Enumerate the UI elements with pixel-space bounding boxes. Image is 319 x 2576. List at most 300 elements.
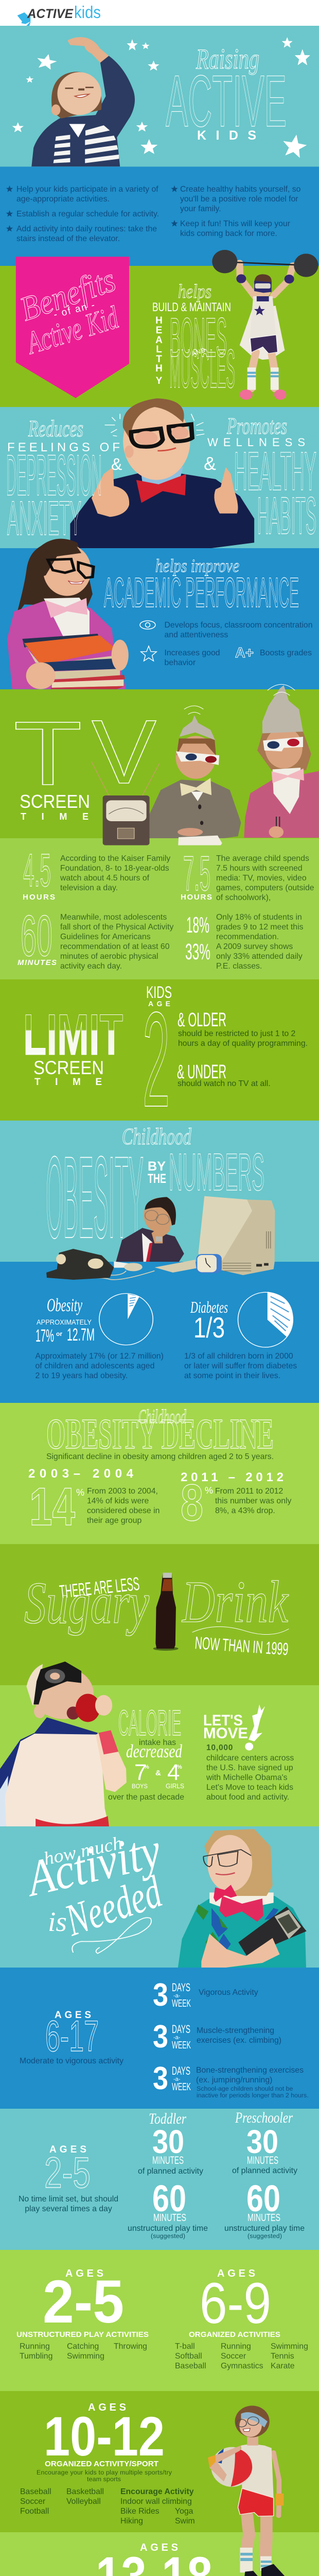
text: calorie intake decreased: GIRLS: [166, 1782, 184, 1790]
column: toddler: 30: [152, 2123, 184, 2160]
heading: helps build and maintain healthy bones and muscles: AND: [191, 346, 207, 358]
heading: reduces feelings of depression and anxiety: [6, 415, 122, 545]
stat: 7.5 hours: games, computers (outside: [216, 884, 314, 892]
panel: benefits, bones and muscles: [0, 250, 319, 407]
panel: ages 10-12: [0, 2391, 319, 2532]
text: 10,000 childcare centers: with Michelle Obama's: [206, 1773, 288, 1782]
text: calorie intake decreased: %: [177, 1764, 182, 1770]
heading: Raising Active Kids: [166, 43, 287, 143]
column: ages 2-5 activities: 2-5: [43, 2268, 124, 2336]
text: calorie intake decreased: 4: [167, 1760, 180, 1785]
stat: 60 minutes: activity each day.: [60, 962, 122, 971]
stat: 2003 to 2004: %: [76, 1487, 84, 1498]
heading: childhood obesity decline: Significant decline in obesity among children aged 2 to 5 years.: [46, 1452, 274, 1461]
column: preschooler: of planned activity: [232, 2166, 297, 2175]
text: tips right column: Create healthy habits yourself, so: [180, 185, 301, 194]
column: ages 6-9 activities: AGES: [217, 2268, 255, 2279]
column: ages 6-9 activities: [175, 2268, 308, 2370]
icon: smiling star: [141, 646, 156, 661]
text: tips left column: Establish a regular schedule for activity.: [16, 210, 159, 218]
panel: calorie intake and Let's Move: [0, 1662, 319, 1826]
text: obesity description: Approximately 17% (or 12.7 million): [35, 1352, 164, 1361]
column: ages 2-5 activities: Tumbling: [20, 2352, 52, 2361]
item: 3 days a week muscle-strengthening: -a-: [173, 2035, 181, 2041]
logo: Let's Move: MOVE: [203, 1725, 248, 1742]
text: tips right column: Keep it fun! This will keep your: [180, 219, 290, 228]
list: encourage activity: Encourage Activity: [120, 2487, 194, 2496]
item: 3 days a week bone-strengthening: -a-: [173, 2076, 181, 2082]
text: diabetes description: at some point in their lives.: [184, 1371, 280, 1380]
heading: helps build and maintain healthy bones and muscles: A: [155, 335, 163, 346]
text: obesity description: 2 to 19 years had obesity.: [35, 1371, 128, 1380]
item: 3 days a week muscle-strengthening: 3: [153, 2019, 168, 2055]
photo: girl with glasses holding a calculator: [178, 1829, 307, 1968]
heading: ages 10-12: team sports: [87, 2476, 121, 2483]
stat: 2003 to 2004: [28, 1467, 160, 1537]
icons: star bullets: [6, 185, 178, 232]
stat: 2011 to 2012: %: [205, 1485, 213, 1496]
photo: girl with glasses holding books: [7, 539, 129, 689]
stat: obesity: [36, 1295, 95, 1346]
heading: ages 2-5: No time limit set, but should: [19, 2195, 118, 2204]
text: tips left column: age-appropriate activities.: [16, 195, 110, 204]
heading: helps build and maintain healthy bones and muscles: L: [156, 344, 162, 355]
list: encourage activity: Hiking: [120, 2517, 143, 2526]
column: preschooler: 60: [246, 2178, 280, 2219]
stat: 18 and 33 percent: 33%: [185, 939, 210, 964]
photo: girl lifting barbell: [212, 250, 318, 400]
stat: 18 and 33 percent: P.E. classes.: [216, 962, 262, 971]
text: calorie intake decreased: intake has: [139, 1738, 176, 1747]
stat: 60 minutes: [17, 904, 173, 971]
text: calorie intake decreased: 7: [134, 1760, 147, 1785]
item: 3 days a week muscle-strengthening: [153, 2019, 281, 2055]
heading: helps build and maintain healthy bones and muscles: T: [156, 354, 162, 365]
text: diabetes description: or later will suffer from diabetes: [184, 1362, 297, 1370]
text: develops focus: [165, 621, 313, 639]
stat: diabetes: 1/3: [193, 1311, 225, 1344]
panel: sugary drinks: [0, 1544, 319, 1685]
panel: screen time statistics: [0, 838, 319, 979]
text: develops focus: and attentiveness: [165, 631, 228, 639]
panel: academic performance: [0, 539, 319, 689]
heading: ages 10-12: AGES: [88, 2402, 126, 2413]
stat: 2011 to 2012: From 2011 to 2012: [215, 1487, 283, 1496]
column: ages 2-5 activities: UNSTRUCTURED PLAY ACTIVITIES: [16, 2330, 149, 2339]
heading: limit screen time: [23, 1003, 123, 1088]
stat: 18 and 33 percent: A 2009 survey shows: [216, 942, 293, 951]
heading: ages 10-12: 10-12: [44, 2405, 165, 2467]
heading: ages 10-12: [37, 2402, 172, 2483]
text: 2 and under: & UNDER: [177, 1061, 226, 1083]
photo: boy reaching up with stars: [12, 37, 310, 166]
stat: 2011 to 2012: 8%, a 43% drop.: [215, 1506, 275, 1515]
logo wordmark: [27, 3, 101, 22]
stat: 2003 to 2004: 2003– 2004: [28, 1467, 134, 1481]
heading: there are less sugary drink now than in 1999: Sugary: [24, 1570, 149, 1636]
logo wordmark: kids: [74, 3, 101, 22]
stat: 7.5 hours: media: TV, movies, video: [216, 874, 307, 883]
heading: limit screen time: TIME: [34, 1077, 102, 1088]
heading: how much activity is needed: Needed: [59, 1867, 168, 1946]
chart: diabetes pie: [238, 1292, 293, 1347]
stat: obesity: 12.7M: [67, 1325, 95, 1345]
text: 10,000 childcare centers: about food and activity.: [206, 1793, 289, 1802]
item: 3 days a week bone-strengthening: School-age children should not be: [197, 2085, 293, 2092]
column: toddler: Toddler: [149, 2110, 186, 2127]
text: 10,000 childcare centers: [206, 1743, 294, 1802]
list: encourage activity: Bike Rides: [120, 2507, 160, 2516]
text: diabetes description: 1/3 of all children born in 2000: [184, 1352, 293, 1361]
item: 3 days a week bone-strengthening: WEEK: [172, 2081, 191, 2093]
column: toddler: unstructured play time: [128, 2224, 208, 2233]
stat: 4.5 hours: 4.5: [23, 845, 51, 896]
list: organized sports: Baseball: [20, 2487, 51, 2496]
panel: limit screen time: 2: [143, 984, 170, 1135]
stat: 2011 to 2012: 2011 – 2012: [181, 1470, 283, 1484]
stat: 60 minutes: 60: [21, 904, 52, 968]
panel: obesity by the numbers heading: [0, 1121, 319, 1262]
text: calorie intake decreased: BOYS: [132, 1783, 148, 1790]
graphic: kids age 2: [143, 983, 172, 1135]
text: increases good behavior: Increases good: [165, 649, 220, 657]
stat: 18 and 33 percent: 18%: [186, 912, 209, 938]
stat: 18 and 33 percent: [185, 912, 304, 971]
item: 3 days a week bone-strengthening: (ex. jumping/running): [196, 2076, 272, 2084]
column: preschooler: (suggested): [247, 2232, 282, 2240]
text: tips right column: kids coming back for more.: [180, 229, 277, 238]
stat: 60 minutes: Meanwhile, most adolescents: [60, 913, 167, 922]
stat: 7.5 hours: [181, 846, 314, 902]
stat: 2011 to 2012: this number was only: [215, 1497, 291, 1505]
stat: 4.5 hours: [23, 845, 170, 902]
text: calorie intake decreased: [108, 1703, 184, 1802]
text: increases good behavior: [165, 649, 220, 667]
heading: there are less sugary drink now than in 1999: THERE ARE LESS: [59, 1573, 140, 1602]
panel: ages 2-5 toddler and preschooler: [0, 2109, 319, 2250]
panel: limit screen time: [0, 979, 319, 1135]
heading: childhood obesity decline: Childhood: [138, 1406, 187, 1428]
heading: ages 6-17: Moderate to vigorous activity: [20, 2057, 123, 2065]
item: 3 days a week muscle-strengthening: Muscle-strengthening: [197, 2026, 274, 2035]
heading: helps build and maintain healthy bones and muscles: [152, 281, 235, 399]
column: ages 6-9 activities: Karate: [271, 2362, 295, 2370]
column: ages 6-9 activities: Running: [221, 2342, 251, 2351]
photo: boy and girl with foil hats and 3D glasses: [150, 684, 319, 839]
heading: helps improve academic performance: helps improve: [155, 555, 239, 576]
text: increases good behavior: behavior: [165, 658, 196, 667]
panel: obesity and diabetes statistics: [0, 1262, 319, 1403]
panel: ages 13-18: [0, 2532, 319, 2576]
heading: ages 13-18: AGES: [140, 2542, 178, 2553]
heading: how much activity is needed: [20, 1822, 168, 1954]
text: 10,000 childcare centers: the U.S. have signed up: [206, 1764, 293, 1772]
heading: promotes wellness and healthy habits: &: [204, 453, 216, 474]
stat: 7.5 hours: of schoolwork),: [216, 893, 271, 902]
photo: soda bottle: [153, 1573, 289, 1651]
item: 3 days a week bone-strengthening: [153, 2061, 309, 2099]
heading: promotes wellness and healthy habits: [204, 413, 316, 545]
column: toddler: (suggested): [151, 2232, 185, 2240]
heading: promotes wellness and healthy habits: Promotes: [226, 413, 287, 439]
stat: 18 and 33 percent: Only 18% of students in: [216, 913, 302, 922]
item: 3 days a week muscle-strengthening: DAYS: [172, 2023, 190, 2036]
stat: 2003 to 2004: 14: [29, 1477, 75, 1537]
logo wordmark: ACTIVE: [27, 7, 74, 21]
column: ages 2-5 activities: Catching: [67, 2342, 99, 2351]
heading: ages 10-12: ORGANIZED ACTIVITY/SPORT: [45, 2460, 158, 2468]
column: ages 2-5 activities: Swimming: [67, 2352, 104, 2361]
column: toddler: MINUTES: [153, 2212, 186, 2224]
column: preschooler: 30: [246, 2123, 278, 2160]
stat: 2003 to 2004: their age group: [87, 1516, 141, 1525]
item: 3 days a week bone-strengthening: Bone-strengthening exercises: [196, 2066, 304, 2075]
heading: how much activity is needed: Activity: [20, 1822, 166, 1908]
stat: obesity: or: [56, 1330, 62, 1337]
item: 3 days a week vigorous activity: WEEK: [172, 1998, 191, 2009]
panel: logo header: [0, 0, 319, 28]
heading: childhood obesity by the numbers: Childhood: [122, 1123, 192, 1149]
item: 3 days a week vigorous activity: DAYS: [172, 1981, 190, 1994]
heading: helps build and maintain healthy bones and muscles: helps: [178, 281, 211, 302]
stat: 4.5 hours: According to the Kaiser Family: [60, 854, 170, 863]
text: 2 and older: should be restricted to just 1 to 2: [178, 1029, 295, 1038]
text: tips left column: stairs instead of the elevator.: [16, 234, 120, 243]
list: encourage activity: [120, 2487, 195, 2526]
column: toddler: [128, 2110, 208, 2240]
stat: obesity: APPROXIMATELY: [37, 1318, 92, 1326]
stat: 2011 to 2012: [181, 1470, 291, 1532]
text: calorie intake decreased: %: [144, 1764, 149, 1770]
stat: 18 and 33 percent: grades 9 to 12 meet this: [216, 923, 304, 931]
text: tips left column: Add activity into daily routines: take the: [16, 225, 157, 233]
heading: limit screen time: LIMIT: [23, 1003, 123, 1067]
text: obesity description: [35, 1352, 164, 1380]
text: calorie intake decreased: &: [155, 1769, 161, 1777]
panel: calorie intake and Let's Move: CALORIE: [118, 1703, 181, 1743]
panel: obesity decline: [0, 1403, 319, 1544]
stat: 7.5 hours: The average child spends: [216, 854, 309, 863]
heading: how much activity is needed: is: [48, 1906, 67, 1937]
item: 3 days a week muscle-strengthening: exercises (ex. climbing): [197, 2036, 281, 2045]
column: ages 6-9 activities: 6-9: [200, 2271, 271, 2335]
heading: helps build and maintain healthy bones and muscles: H: [155, 315, 163, 326]
panel: hero: [0, 26, 319, 167]
item: 3 days a week vigorous activity: 3: [153, 1977, 168, 2013]
heading: ages 2-5: 2-5: [44, 2148, 91, 2197]
heading: limit screen time: SCREEN: [33, 1057, 104, 1078]
list: organized sports: [20, 2487, 104, 2516]
stat: 2003 to 2004: 14% of kids were: [87, 1497, 149, 1505]
heading: TV screen time: SCREEN: [20, 791, 90, 812]
logo: Let's Move: [203, 1704, 265, 1751]
stat: 60 minutes: recommendation of at least 60: [60, 942, 170, 951]
list: encourage activity: Yoga: [175, 2507, 193, 2516]
list: encourage activity: Swim: [175, 2517, 195, 2526]
column: preschooler: Preschooler: [235, 2109, 293, 2126]
stat: obesity: 17%: [36, 1326, 54, 1346]
stat: 60 minutes: fall short of the Physical Activity: [60, 923, 173, 931]
heading: TV screen time: T: [13, 703, 82, 804]
heading: childhood obesity by the numbers: BY: [148, 1159, 166, 1174]
column: preschooler: unstructured play time: [224, 2224, 305, 2233]
text: 10,000 childcare centers: Let's Move to teach kids: [206, 1783, 293, 1792]
heading: reduces feelings of depression and anxiety: ANXIETY: [7, 491, 81, 545]
stat: obesity: Obesity: [47, 1295, 82, 1315]
text: tips right column: [180, 185, 301, 238]
chart: obesity pie: [99, 1294, 153, 1345]
icon: Active Kids mascot: [17, 12, 30, 28]
stat: 18 and 33 percent: recommendation.: [216, 933, 279, 941]
list: encourage activity: Indoor wall climbing: [120, 2497, 192, 2506]
heading: helps build and maintain healthy bones and muscles: Y: [156, 376, 163, 386]
banner: Benefits of an Active Kid: [15, 257, 129, 398]
heading: reduces feelings of depression and anxiety: Reduces: [28, 415, 83, 442]
stat: 60 minutes: MINUTES: [17, 958, 57, 967]
panel: tips for parents: [0, 167, 319, 266]
text: tips right column: your family.: [180, 205, 221, 213]
text: calorie intake decreased: over the past decade: [108, 1793, 184, 1802]
text: 2 and older: [178, 1009, 308, 1048]
column: toddler: MINUTES: [152, 2155, 184, 2166]
icon: A plus grade: A+: [235, 645, 254, 660]
heading: reduces feelings of depression and anxiety: &: [111, 455, 122, 473]
photo: analog meter with antennas and notepad: [92, 761, 222, 845]
panel: TV screen time: [0, 684, 319, 839]
photo: bored boy in a suit: [116, 1197, 184, 1262]
heading: ages 2-5: AGES: [49, 2144, 86, 2155]
item: 3 days a week bone-strengthening: DAYS: [172, 2064, 190, 2077]
heading: helps build and maintain healthy bones and muscles: E: [156, 325, 162, 336]
stat: 4.5 hours: television a day.: [60, 884, 118, 892]
column: toddler: of planned activity: [138, 2167, 203, 2176]
text: 10,000 childcare centers: 10,000: [206, 1743, 233, 1752]
column: ages 6-9 activities: Gymnastics: [221, 2362, 263, 2370]
heading: ages 13-18: [56, 2542, 255, 2576]
banner: Benefits of an Active Kid: - of an -: [52, 299, 97, 320]
panel: ages 6-17: [0, 1968, 319, 2109]
stat: 18 and 33 percent: only 33% attended daily: [216, 952, 303, 961]
heading: there are less sugary drink now than in 1999: [24, 1569, 289, 1659]
stat: 4.5 hours: HOURS: [23, 893, 55, 902]
heading: ages 2-5: [19, 2144, 118, 2213]
column: ages 2-5 activities: AGES: [65, 2268, 103, 2279]
column: ages 2-5 activities: Throwing: [114, 2342, 147, 2351]
heading: Raising Active Kids: Raising: [196, 43, 259, 75]
column: ages 6-9 activities: Swimming: [271, 2342, 308, 2351]
stat: diabetes: [190, 1298, 228, 1344]
column: ages 6-9 activities: Tennis: [271, 2352, 294, 2361]
item: 3 days a week bone-strengthening: 3: [153, 2061, 168, 2096]
text: 2 and under: should watch no TV at all.: [178, 1079, 271, 1088]
item: 3 days a week bone-strengthening: inactive for periods longer than 2 hours.: [197, 2092, 309, 2099]
text: boosts grades: Boosts grades: [260, 649, 312, 657]
heading: helps build and maintain healthy bones and muscles: BUILD & MAINTAIN: [152, 300, 231, 314]
photo: boy in big glasses with thumbs up: [70, 398, 254, 548]
column: ages 6-9 activities: ORGANIZED ACTIVITIES: [189, 2330, 280, 2339]
stat: 4.5 hours: watch about 4.5 hours of: [60, 874, 150, 883]
heading: helps build and maintain healthy bones and muscles: H: [155, 363, 163, 374]
heading: how much activity is needed: how much: [42, 1832, 124, 1869]
heading: promotes wellness and healthy habits: WELLNESS: [207, 436, 305, 449]
heading: ages 6-17: 6-17: [45, 2012, 99, 2060]
heading: TV screen time: V: [92, 702, 156, 803]
item: 3 days a week muscle-strengthening: WEEK: [172, 2040, 191, 2051]
text: tips right column: you'll be a positive role model for: [180, 195, 298, 204]
stat: 2003 to 2004: considered obese in: [87, 1506, 160, 1515]
text: tips left column: Help your kids participate in a variety of: [16, 185, 158, 194]
illustration: vintage computer, phone, clock and keyboard: [46, 1196, 275, 1280]
heading: TV screen time: [13, 702, 156, 822]
stat: 7.5 hours: HOURS: [181, 893, 212, 902]
text: develops focus: Develops focus, classroom concentration: [165, 621, 313, 630]
text: calorie intake decreased: decreased: [126, 1741, 183, 1761]
column: preschooler: MINUTES: [247, 2155, 278, 2166]
text: tips left column: [16, 185, 159, 243]
stat: 7.5 hours: 7.5 hours with screened: [216, 864, 303, 873]
text: 10,000 childcare centers: childcare centers across: [206, 1754, 294, 1762]
heading: childhood obesity by the numbers: THE: [148, 1172, 166, 1186]
icon: eye: [140, 621, 155, 629]
text: 2 and older: & OLDER: [178, 1009, 226, 1031]
panel: how much activity is needed: [0, 1822, 319, 1968]
item: 3 days a week vigorous activity: Vigorous Activity: [199, 1988, 258, 1997]
text: 2 and older: hours a day of quality programming.: [178, 1039, 308, 1048]
heading: TV screen time: TIME: [21, 811, 88, 822]
list: organized sports: Football: [20, 2507, 49, 2516]
column: preschooler: MINUTES: [247, 2212, 280, 2224]
heading: ages 6-17: [20, 2010, 123, 2065]
list: organized sports: Soccer: [20, 2497, 45, 2506]
text: diabetes description: [184, 1352, 297, 1380]
panel: activities for ages 2-5 and 6-9: [0, 2250, 319, 2391]
stat: 60 minutes: minutes of aerobic physical: [60, 952, 158, 961]
list: organized sports: Basketball: [66, 2487, 104, 2496]
text: obesity description: of children and adolescents aged: [35, 1362, 154, 1370]
stat: 4.5 hours: Foundation, 8- to 18-year-olds: [60, 864, 169, 873]
column: ages 2-5 activities: Running: [20, 2342, 50, 2351]
photo: boy with basketball, glasses and headband: [208, 2405, 291, 2576]
heading: there are less sugary drink now than in 1999: Drink: [181, 1569, 289, 1635]
column: ages 6-9 activities: Baseball: [175, 2362, 206, 2370]
column: ages 6-9 activities: Soccer: [221, 2352, 246, 2361]
stat: 7.5 hours: 7.5: [183, 846, 210, 901]
column: ages 6-9 activities: T-ball: [175, 2342, 195, 2351]
column: ages 6-9 activities: Softball: [175, 2352, 202, 2361]
graphic: kids age 2: KIDS: [146, 983, 172, 1002]
heading: reduces feelings of depression and anxiety: FEELINGS OF: [7, 440, 120, 454]
heading: Raising Active Kids: KIDS: [197, 128, 256, 143]
banner: Benefits of an Active Kid: Active Kid: [22, 300, 123, 361]
banner: Benefits of an Active Kid: Benefits: [15, 261, 120, 328]
heading: ages 2-5: play several times a day: [25, 2205, 112, 2213]
stat: 60 minutes: Guidelines for Americans: [60, 933, 151, 941]
stat: 2003 to 2004: From 2003 to 2004,: [87, 1487, 158, 1496]
column: ages 2-5 activities: [16, 2268, 149, 2361]
graphic: kids age 2: AGE: [148, 999, 170, 1008]
panel: reduces depression, promotes wellness: [0, 398, 319, 548]
column: toddler: 60: [152, 2178, 186, 2219]
stat: 2011 to 2012: 8: [181, 1474, 203, 1532]
heading: ages 10-12: Encourage your kids to play multiple sports/try: [37, 2469, 172, 2476]
photo: boy with goggles and cape eating an apple: [0, 1662, 127, 1826]
item: 3 days a week vigorous activity: [153, 1977, 258, 2013]
column: preschooler: [224, 2109, 305, 2240]
stat: diabetes: Diabetes: [190, 1298, 228, 1316]
list: organized sports: Volleyball: [66, 2497, 101, 2506]
logo: Let's Move: LET'S: [203, 1712, 243, 1729]
item: 3 days a week vigorous activity: -a-: [173, 1993, 181, 1999]
